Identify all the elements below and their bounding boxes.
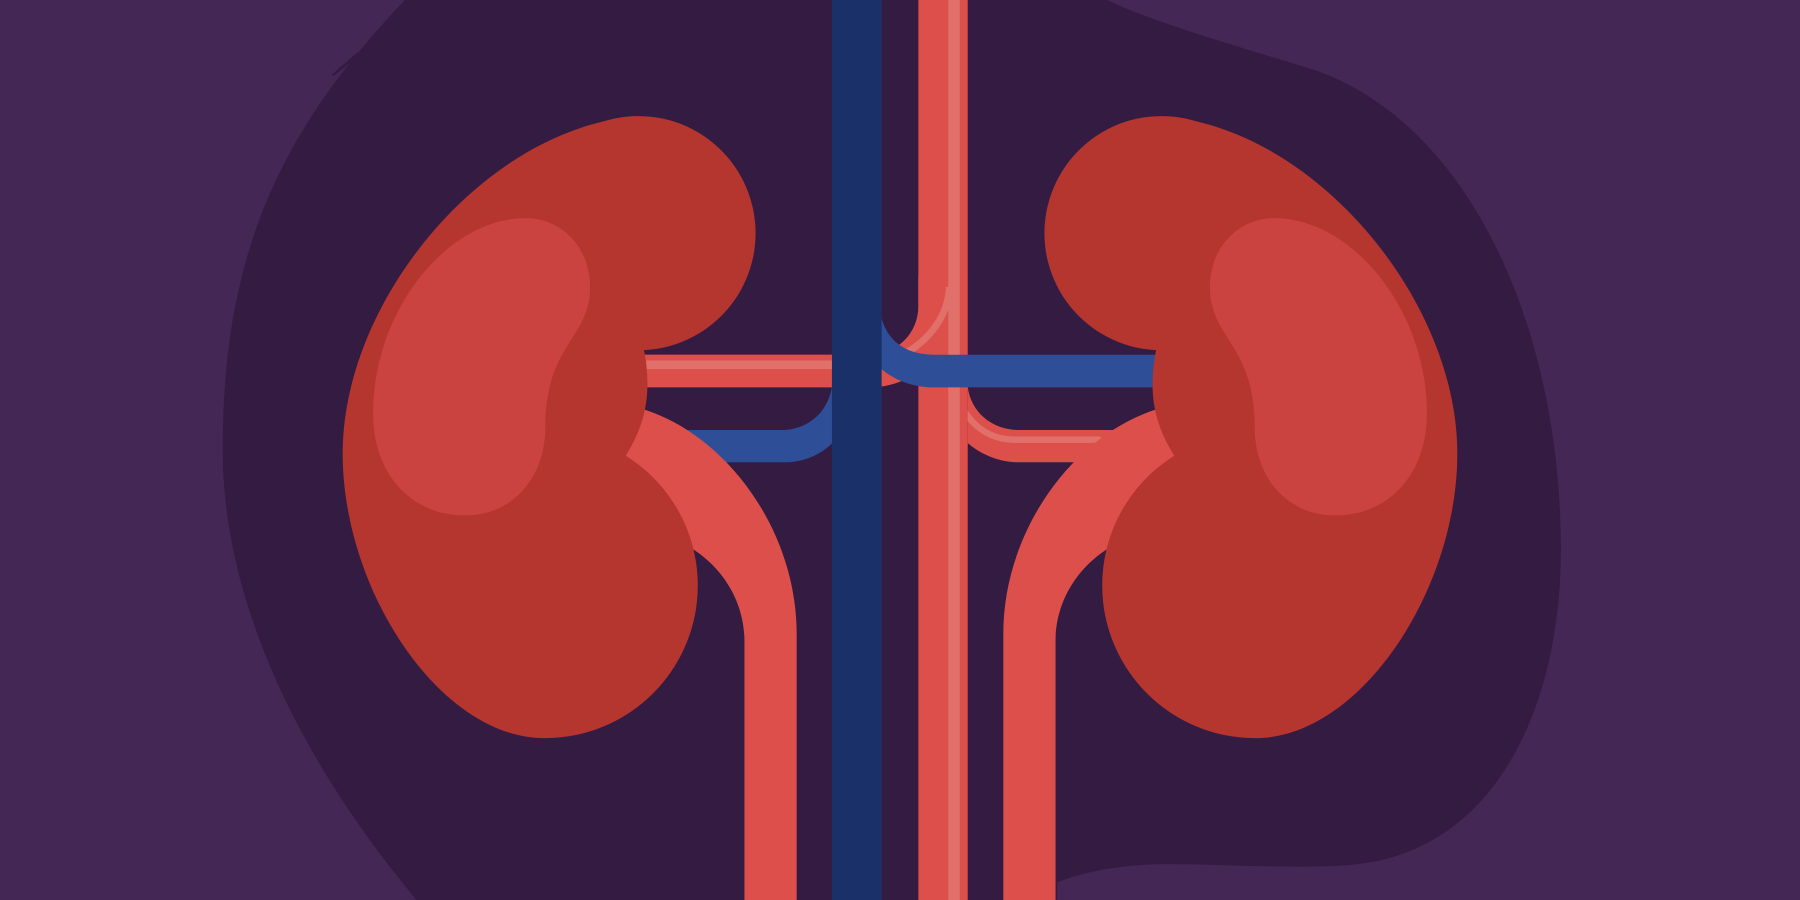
dark background blob: [223, 0, 1561, 900]
left ureter: [614, 408, 797, 900]
left renal vein: [677, 385, 832, 462]
artery highlight: [646, 360, 836, 369]
aorta highlight: [948, 0, 960, 900]
right branch highlight: [957, 390, 1101, 440]
right kidney inner: [1210, 218, 1427, 515]
left kidney: [343, 116, 756, 738]
aorta: [918, 0, 968, 900]
left kidney inner: [373, 218, 590, 515]
right renal artery branch: [968, 387, 1125, 462]
right kidney: [1044, 116, 1457, 738]
left renal artery: [637, 276, 935, 371]
right renal vein: [879, 308, 1159, 387]
vena cava: [832, 0, 882, 900]
upper aorta branch highlight: [907, 287, 949, 352]
right ureter: [1003, 408, 1186, 900]
